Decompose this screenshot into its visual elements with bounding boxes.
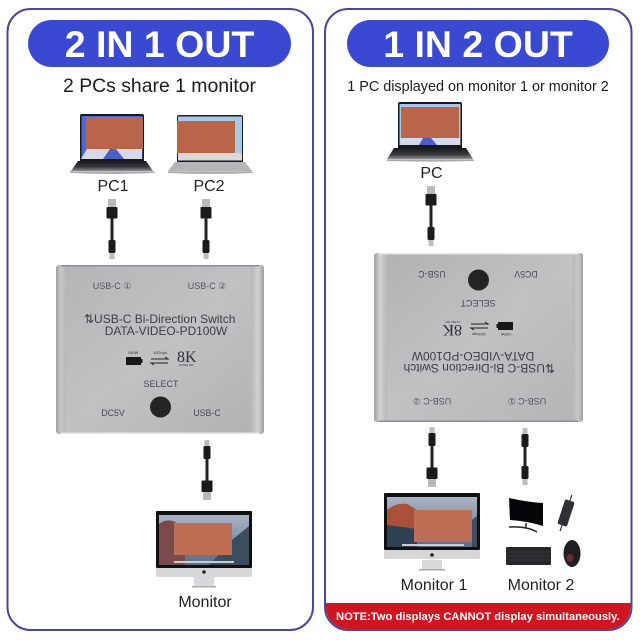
heading pill: 2 IN 1 OUT: 2 IN 1 OUT bbox=[65, 23, 254, 65]
switch device (upside down): USB-C bbox=[418, 269, 446, 279]
panel: 1 in 2 out bbox=[325, 9, 632, 630]
switch device (upside down): 100W bbox=[501, 332, 511, 337]
icon: curved monitor bbox=[509, 498, 543, 532]
switch device bbox=[56, 265, 264, 434]
heading pill: 2 IN 1 OUT bbox=[28, 20, 291, 67]
label: PC1: PC1 bbox=[97, 178, 129, 195]
switch device: ⇅USB-C Bi-Direction Switch bbox=[84, 312, 235, 326]
switch device: SELECT bbox=[143, 379, 179, 389]
label: Monitor 2: Monitor 2 bbox=[508, 577, 574, 594]
label: PC: PC bbox=[420, 165, 443, 182]
switch device: DATA-VIDEO-PD100W bbox=[105, 324, 228, 338]
switch device: 100W bbox=[128, 350, 138, 355]
heading pill: 1 IN 2 OUT bbox=[347, 20, 609, 67]
switch device: ULTRA HD bbox=[179, 363, 194, 367]
subtitle: 2 PCs share 1 monitor bbox=[63, 75, 256, 97]
switch device: DC5V bbox=[101, 408, 125, 418]
icon: keyboard bbox=[506, 547, 551, 565]
heading pill: 1 IN 2 OUT: 1 IN 2 OUT bbox=[383, 23, 573, 65]
icons: monitor 2 peripherals bbox=[506, 493, 580, 567]
icon: USB hub bbox=[555, 493, 577, 533]
cable: switch to monitor bbox=[202, 440, 212, 500]
note banner bbox=[326, 603, 630, 629]
subtitle: 1 PC displayed on monitor 1 or monitor 2 bbox=[347, 79, 609, 95]
cable: switch to monitor 2 bbox=[522, 428, 528, 485]
switch device (upside down): ULTRA HD bbox=[445, 320, 460, 324]
switch device: USB-C ① bbox=[93, 281, 131, 291]
switch device (upside down) bbox=[374, 253, 583, 422]
switch device (upside down): USB-C ② bbox=[413, 396, 451, 406]
switch device (upside down): USB-C ① bbox=[508, 396, 546, 406]
cable: switch to monitor 1 bbox=[426, 427, 438, 487]
label: Monitor: Monitor bbox=[178, 594, 232, 611]
note banner: NOTE:Two displays CANNOT display simultaneously. bbox=[336, 611, 620, 623]
panel: 2 in 1 out bbox=[8, 9, 313, 630]
switch device: USB-C bbox=[193, 408, 221, 418]
switch device (upside down): SELECT bbox=[460, 298, 496, 308]
switch device (upside down): 10Gbps bbox=[472, 332, 486, 337]
switch device (upside down): DC5V bbox=[514, 269, 538, 279]
icon: laptop PC2 bbox=[168, 115, 253, 174]
switch device (upside down): ⇅USB-C Bi-Direction Switch bbox=[404, 361, 555, 375]
cable: PC2 to switch bbox=[200, 199, 212, 259]
switch device: USB-C ② bbox=[188, 281, 226, 291]
icon: desktop monitor 1 bbox=[384, 493, 480, 570]
switch device (upside down): DATA-VIDEO-PD100W bbox=[411, 349, 534, 363]
icon: desktop monitor bbox=[156, 511, 252, 588]
switch device (upside down): 8K bbox=[442, 321, 462, 338]
icon: laptop PC1 bbox=[70, 114, 155, 174]
switch device: 8K bbox=[177, 349, 197, 366]
cable: PC to switch bbox=[426, 186, 436, 246]
icon: gaming mouse bbox=[564, 540, 580, 567]
icon: laptop PC bbox=[387, 102, 474, 162]
label: Monitor 1: Monitor 1 bbox=[401, 577, 467, 594]
cable: PC1 to switch bbox=[106, 199, 118, 259]
switch device: 10Gbps bbox=[153, 350, 167, 355]
label: PC2: PC2 bbox=[193, 178, 225, 195]
